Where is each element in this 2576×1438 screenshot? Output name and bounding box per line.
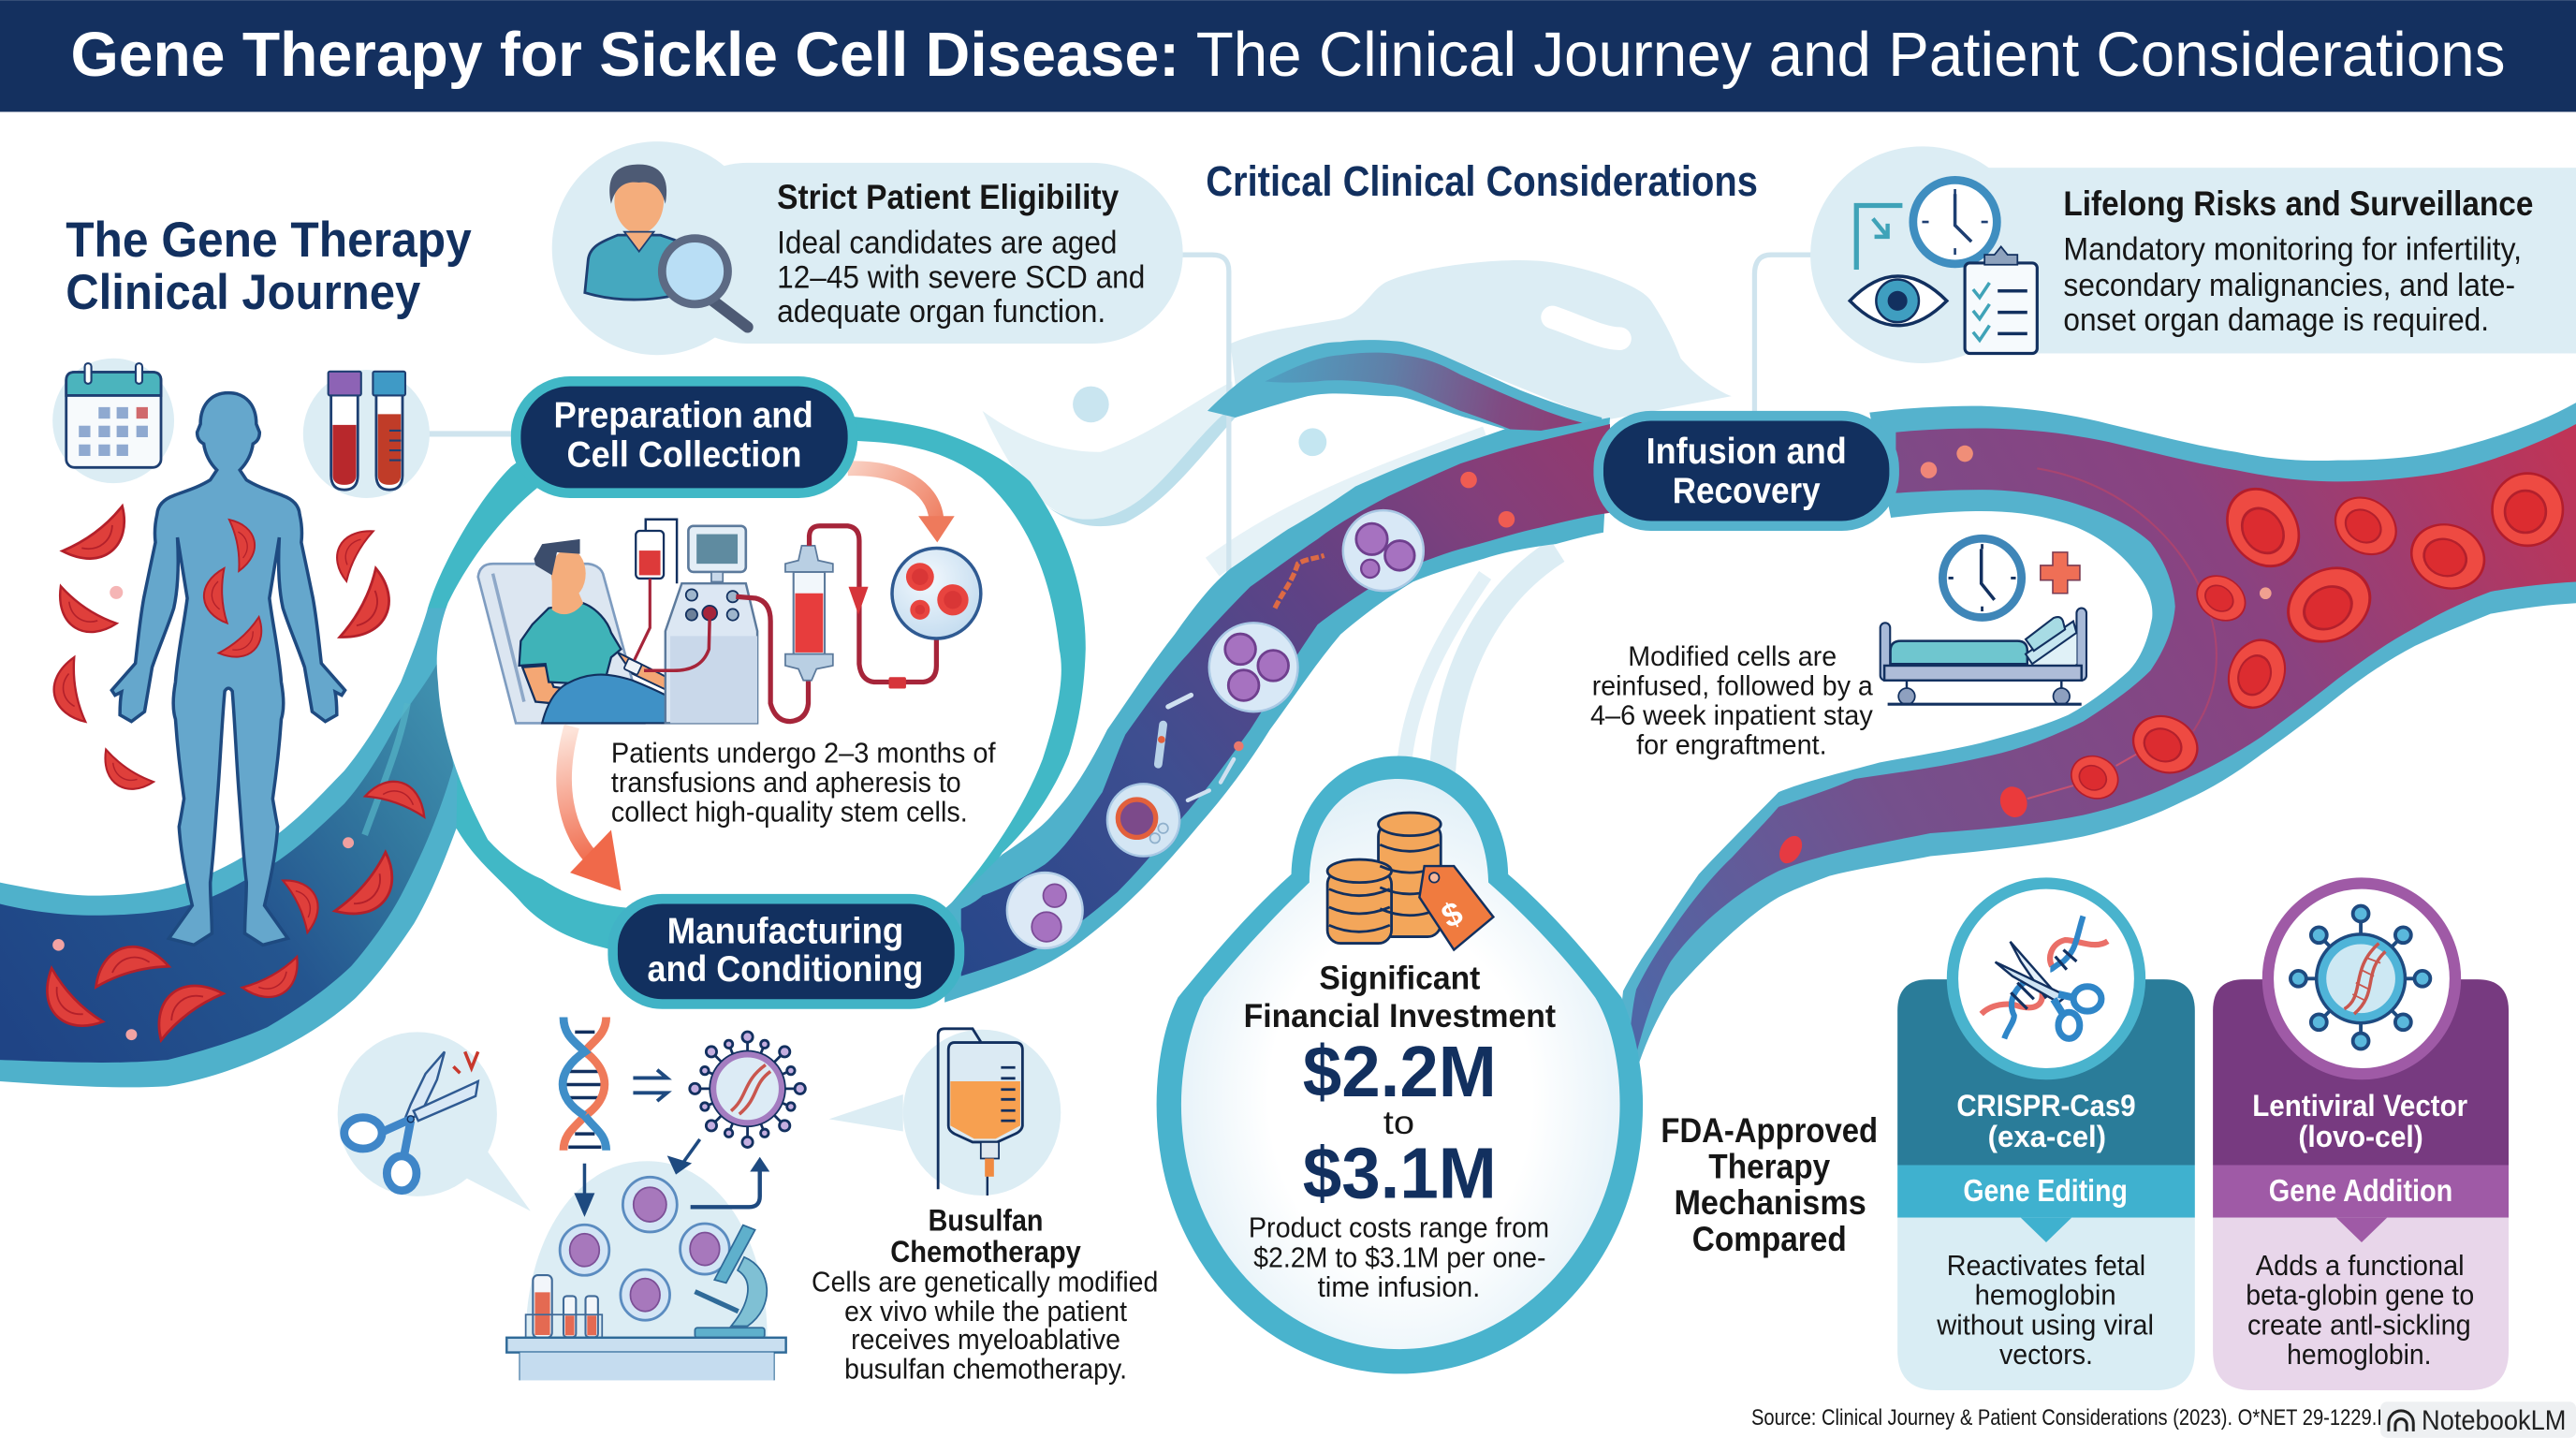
card: crispr-cas9: Gene Editing [1963,1174,2128,1209]
callout: strict patient eligibility: 12–45 with severe SCD and [777,259,1145,295]
title banner [0,0,2576,111]
icon: dna helix [563,1018,607,1151]
text: busulfan chemotherapy: busulfan chemotherapy. [844,1353,1127,1386]
text: infusion description: Modified cells are [1628,641,1837,672]
pill: manufacturing and conditioning: Manufacturing [667,912,903,952]
text: preparation description [611,737,996,829]
text: busulfan chemotherapy: Busulfan [929,1204,1043,1238]
callout: lifelong risks: Mandatory monitoring for infertility, [2063,231,2522,267]
arrows: dna to vector [633,1070,667,1101]
icon: lentiviral particle [2291,906,2430,1049]
vessel: left sickled segment [0,609,460,1087]
icon: hospital bed, clock and cross [1881,538,2086,705]
panel: significant financial investment: Financial Investment [1244,998,1556,1034]
heading: fda-approved mechanisms: Mechanisms [1674,1183,1866,1222]
card: lentiviral vector: hemoglobin. [2287,1338,2432,1371]
callout: lifelong risks: secondary malignancies, and late- [2063,268,2515,303]
heading: fda-approved mechanisms: Therapy [1708,1148,1831,1186]
card: lentiviral vector: Gene Addition [2269,1174,2452,1209]
heading: fda-approved mechanisms [1661,1111,1878,1258]
pill: manufacturing and conditioning: and Conditioning [648,949,923,990]
icon: blood tubes [303,370,430,498]
heading: clinical journey [66,213,472,320]
panel: lab dish with edited cells [506,1139,786,1380]
callout: lifelong risks: onset organ damage is required. [2063,302,2489,338]
bubbles [1073,387,1326,456]
panel: significant financial investment: $2.2M to $3.1M per one- [1253,1240,1546,1273]
card: crispr-cas9: Reactivates fetal [1947,1249,2145,1282]
card: crispr-cas9: (exa-cel) [1988,1120,2106,1153]
pale decorative swirls [983,260,1732,772]
title banner: Gene Therapy for Sickle Cell Disease: [70,21,1179,90]
vessel: modified cells segment [944,418,1610,1003]
icon: coin stacks and price tag [1327,813,1493,950]
icon: coin stacks and price tag: $ [1436,894,1469,935]
healthy red blood cells [1460,446,2563,867]
connector: eligibility to band [1175,255,1229,579]
icon: scissors cutting dna [1982,917,2108,1038]
text: preparation description: Patients undergo 2–3 months of [611,737,996,770]
heading: fda-approved mechanisms: Compared [1692,1220,1847,1258]
text: infusion description: for engraftment. [1636,730,1827,761]
panel: significant financial investment: $2.2M [1303,1032,1497,1112]
card: lentiviral vector: create antl-sickling [2247,1308,2471,1341]
title banner: The Clinical Journey and Patient Considerations [1196,21,2506,90]
text: busulfan chemotherapy: receives myeloablative [851,1323,1120,1356]
icon: patient undergoing apheresis [478,520,981,723]
text: preparation description: transfusions and apheresis to [611,766,961,799]
card: lentiviral vector [2213,884,2509,1390]
heading: critical clinical considerations: Critical Clinical Considerations [1206,157,1758,205]
callout: strict patient eligibility: Ideal candidates are aged [777,225,1117,260]
panel: significant financial investment: time infusion. [1318,1270,1480,1303]
pill: preparation and cell collection: Cell Collection [567,435,801,476]
callout: strict patient eligibility: adequate organ function. [777,294,1105,330]
card: crispr-cas9: hemoglobin [1975,1279,2116,1312]
heading: fda-approved mechanisms: FDA-Approved [1661,1111,1878,1150]
heading: clinical journey: The Gene Therapy [66,213,472,268]
panel: significant financial investment: to [1383,1105,1414,1141]
connector: surveillance to infusion [1754,255,1815,414]
arrow: collection to cell [848,468,955,542]
panel: significant financial investment [1157,756,1643,1373]
text: busulfan chemotherapy: Chemotherapy [890,1235,1081,1269]
callout: strict patient eligibility: Strict Patient Eligibility [777,178,1120,216]
icon: viral vector [690,1032,805,1148]
icon: surveillance clock, eye and checklist [1850,180,2037,353]
text: busulfan chemotherapy: Cells are genetically modified [812,1266,1158,1299]
text: infusion description: reinfused, followed by a [1592,671,1873,702]
pill: manufacturing and conditioning [613,899,959,1005]
modified stem cells [1007,510,1424,948]
card: lentiviral vector: beta-globin gene to [2246,1279,2474,1312]
panel: significant financial investment: $3.1M [1303,1134,1497,1214]
callout: strict patient eligibility [552,141,1183,355]
badge: notebooklm: NotebookLM [2422,1405,2566,1436]
sickled red blood cells [30,504,432,1042]
text: busulfan chemotherapy [812,1204,1158,1386]
preparation ring interior [437,441,1061,937]
card: crispr-cas9: vectors. [1999,1338,2093,1371]
text: infusion description: 4–6 week inpatient stay [1590,700,1873,731]
panel: significant financial investment: Product costs range from [1249,1211,1549,1244]
card: lentiviral vector: (lovo-cel) [2298,1120,2423,1153]
callout: lifelong risks: Lifelong Risks and Surveillance [2063,184,2533,223]
preparation ring outer [411,412,1086,950]
source line: Source: Clinical Journey & Patient Considerations (2023). O*NET 29-1229.I [1751,1406,2382,1431]
icon: human body [111,393,345,945]
card: crispr-cas9: CRISPR-Cas9 [1956,1089,2136,1123]
card: crispr-cas9 [1897,884,2195,1390]
card: crispr-cas9: without using viral [1936,1308,2154,1341]
vessel: upper stream to infusion [1208,340,1602,461]
badge: notebooklm [2380,1401,2576,1438]
arrow: collection to manufacturing [564,726,621,890]
text: preparation description: collect high-quality stem cells. [611,796,968,829]
text: infusion description [1590,641,1873,761]
icon: calendar [52,359,174,483]
pill: infusion and recovery [1599,416,1895,526]
icon: patient with magnifier [585,165,748,327]
pill: preparation and cell collection [516,381,853,493]
connector: tubes to preparation [424,433,518,435]
vessel: recovery segment with healthy cells [1617,403,2576,1105]
pill: infusion and recovery: Recovery [1673,471,1821,511]
heading: clinical journey: Clinical Journey [66,265,420,320]
card: lentiviral vector: Adds a functional [2256,1249,2465,1282]
pill: preparation and cell collection: Preparation and [553,395,813,435]
icon: scissors with speech bubble [338,1032,531,1211]
card: lentiviral vector: Lentiviral Vector [2252,1089,2467,1123]
pill: infusion and recovery: Infusion and [1647,432,1847,472]
text: busulfan chemotherapy: ex vivo while the patient [844,1295,1127,1328]
panel: significant financial investment: Significant [1319,961,1481,997]
icon: busulfan iv bag [829,1029,1061,1196]
callout: lifelong risks [1810,146,2576,363]
